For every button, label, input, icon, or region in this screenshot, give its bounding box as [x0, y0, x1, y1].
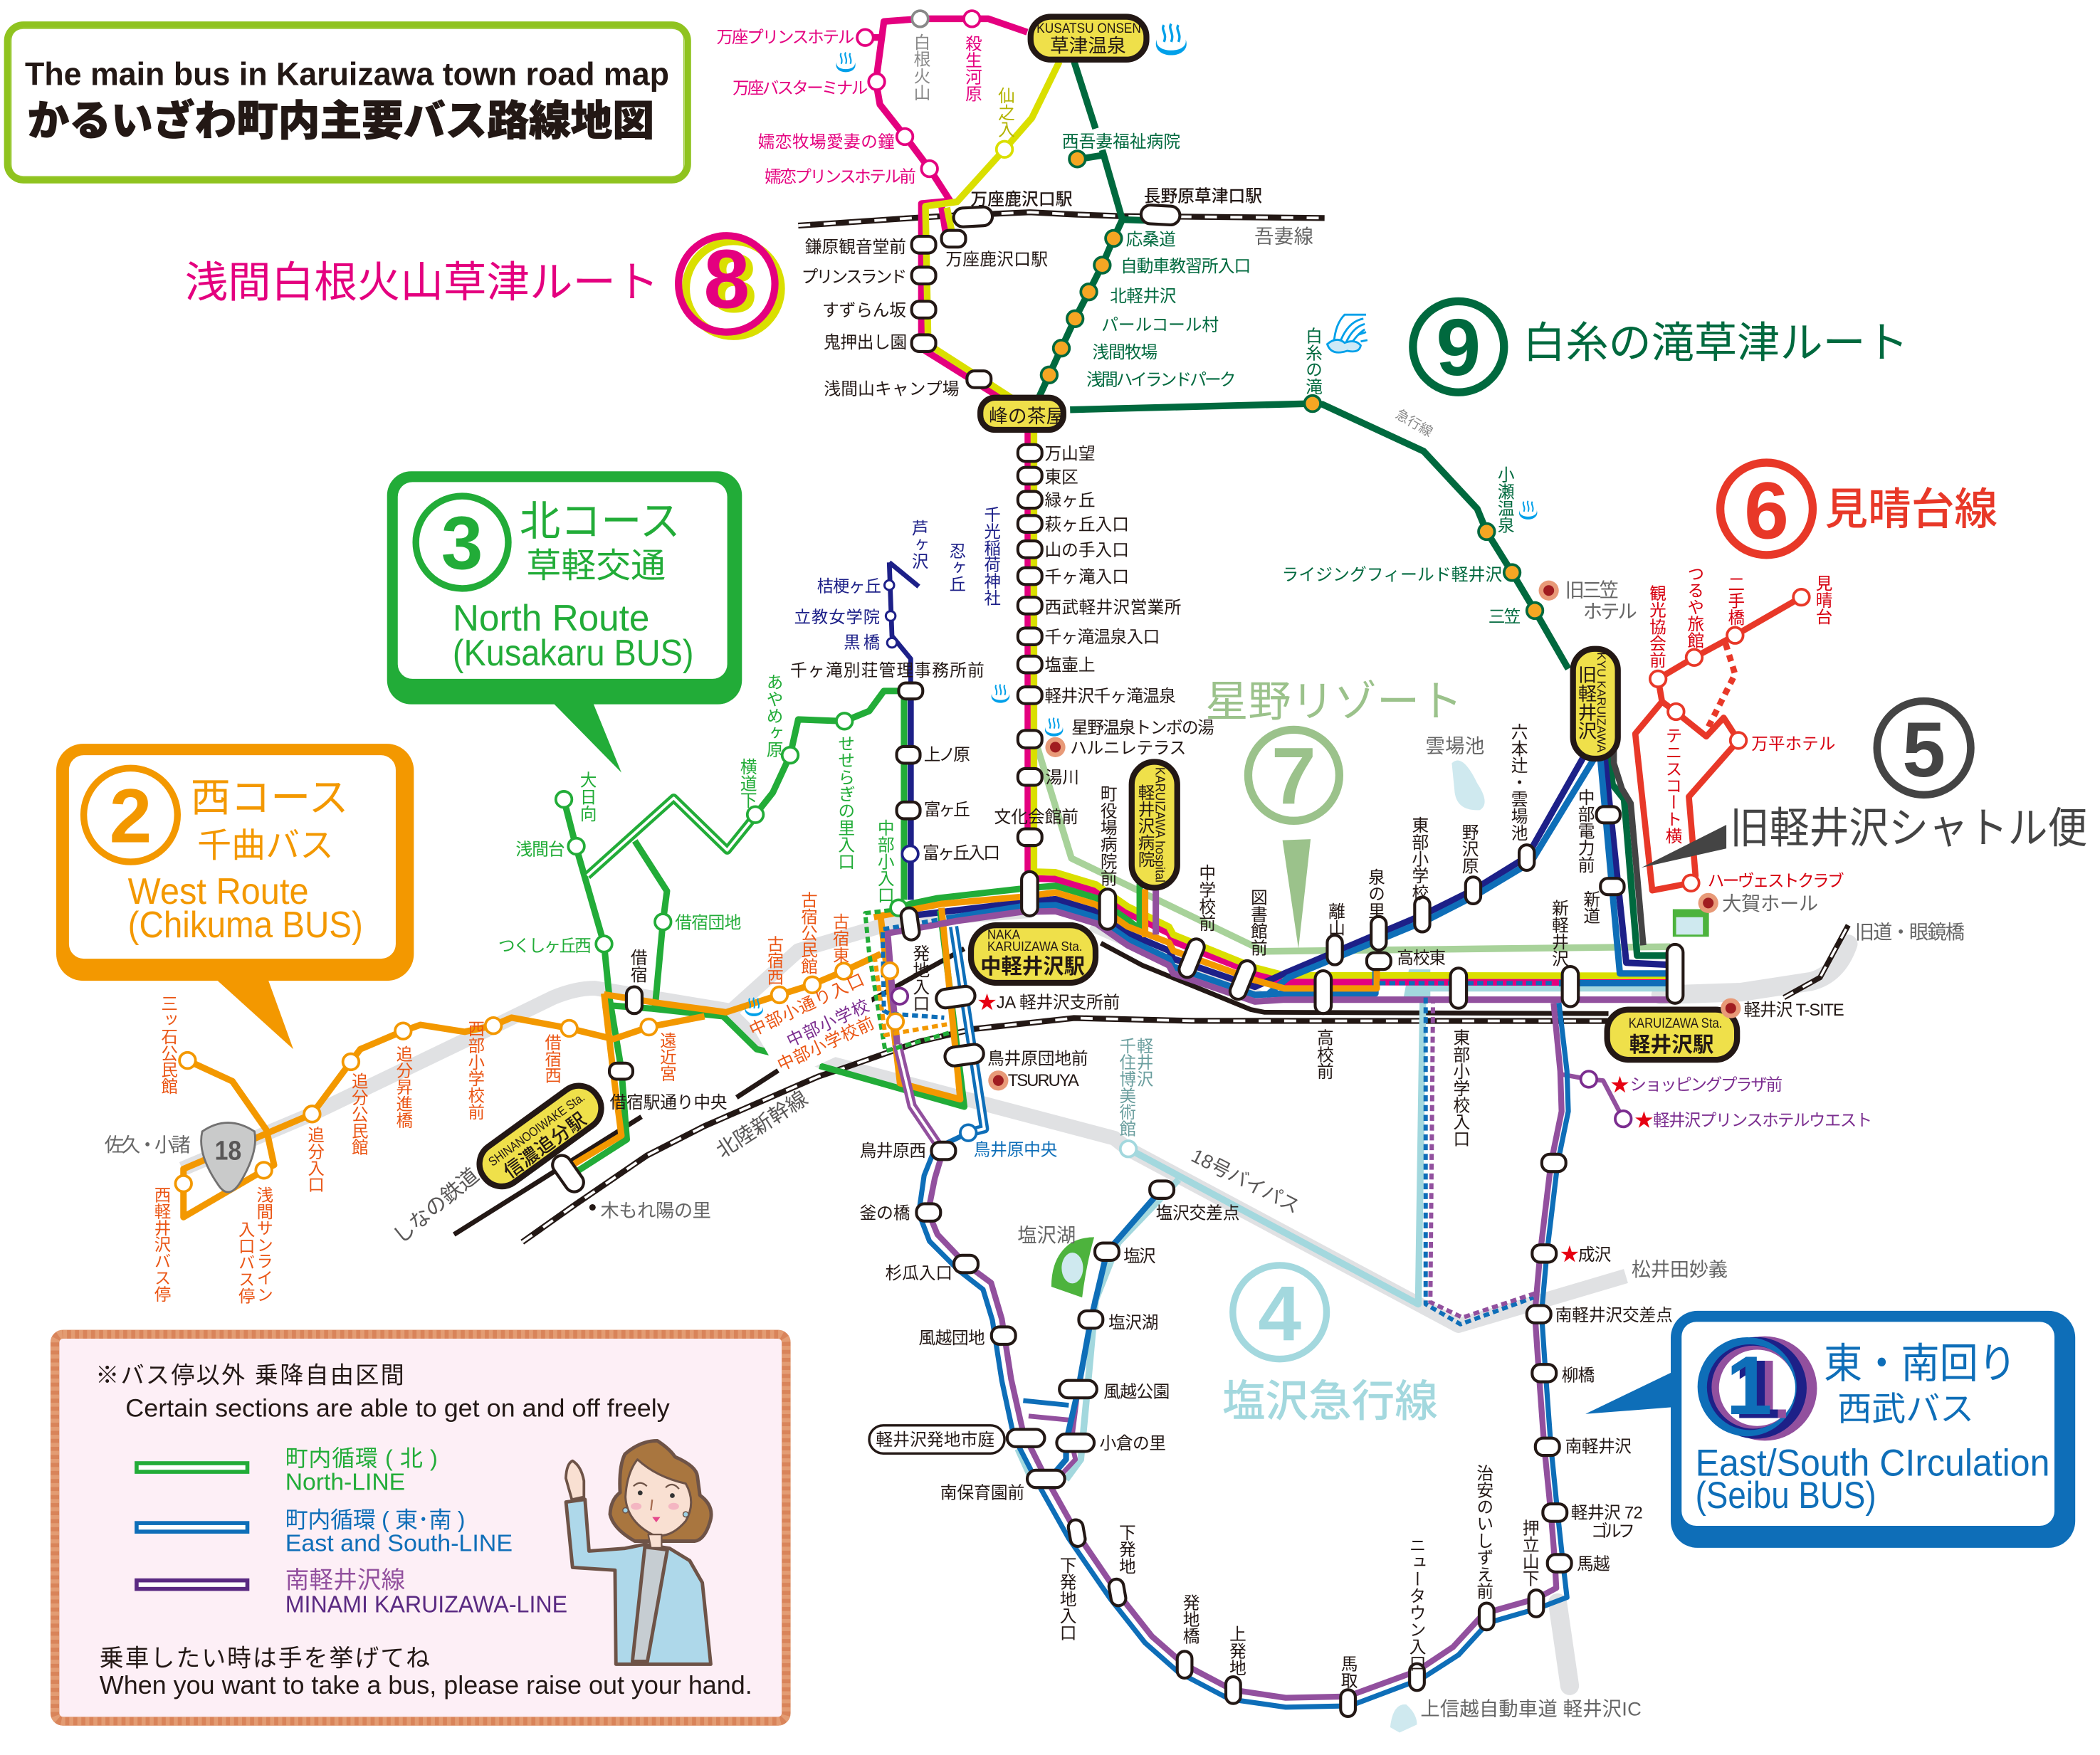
stop: Karuizawa Hatchi market: 軽井沢発地市庭: [876, 1430, 994, 1450]
labels: route 3 north area: 借宿駅通り中央: [610, 1093, 728, 1112]
labels: route 2 west: 借宿西: [542, 1033, 562, 1084]
labels: route 6 and east: 軽井沢 T-SITE: [1744, 1001, 1844, 1020]
labels: route 8 north: 万座鹿沢口駅: [945, 251, 1048, 270]
labels: route 6 and east: 軽井沢プリンスホテルウエスト: [1653, 1111, 1872, 1129]
callout: route 3 North: (Kusakaru BUS): [453, 632, 694, 673]
legend: Minami Karuizawa line: [137, 1567, 567, 1618]
callout: route 2 West: 2: [110, 773, 152, 858]
landmarks: red dots: [589, 581, 1741, 1211]
labels: route 8 north: [717, 28, 1313, 399]
labels: route 6 and east: ★: [1610, 1074, 1629, 1095]
labels: route 2 west: 遠近宮: [658, 1031, 677, 1082]
labels: route 3 north area: 中部小入口: [875, 819, 895, 904]
heading: route 9: 9: [1436, 302, 1481, 392]
labels: central stops: 東部小学校: [1409, 816, 1429, 901]
labels: main trunk: ハルニレテラス: [1070, 739, 1186, 758]
labels: route 9: ライジングフィールド軽井沢: [1281, 566, 1502, 585]
station: Naka-Karuizawa: KARUIZAWA Sta.: [987, 939, 1083, 954]
labels: central stops: TSURUYA: [1008, 1072, 1079, 1090]
stop: Karuizawa Hatchi market: [869, 1425, 1004, 1453]
labels: route 8 north: 万座鹿沢口駅: [970, 190, 1073, 209]
labels: south loop: [860, 1140, 1728, 1720]
heading: route 8: [185, 233, 781, 336]
white backing behind rotated labels: [750, 974, 877, 1078]
heading: route 4: [1222, 1265, 1438, 1425]
labels: south loop: 塩沢: [1123, 1247, 1156, 1266]
callout: route 3 North: 北コース: [520, 499, 681, 545]
labels: south loop: 塩沢湖: [1017, 1224, 1076, 1246]
labels: route 2 west: [105, 891, 877, 1304]
panel: legend: When you want to take a bus, please raise out your hand.: [100, 1671, 752, 1699]
route 3: green north line: [564, 691, 1140, 1173]
labels: route 8 north: すずらん坂: [822, 301, 906, 320]
labels: route 3 north area: あやめヶ原: [764, 673, 783, 758]
labels: route 3 north area: 黒橋: [844, 633, 880, 652]
dotted lines: [865, 909, 1553, 1324]
labels: main trunk: 東区: [1044, 468, 1078, 488]
labels: route 2 west: 浅間サンライン: [254, 1186, 273, 1302]
labels: route 3 north area: 横道下: [737, 758, 757, 808]
station: Karuizawa hospital: 軽井沢病院: [1136, 784, 1155, 868]
legend: east and south line: 町内循環 ( 東･南 ): [285, 1507, 465, 1533]
labels: route 6 and east: 二手橋: [1726, 575, 1745, 626]
callout: route 3 North: [387, 471, 742, 773]
labels: route 2 west: 追分入口: [305, 1126, 325, 1193]
route 9: dark green line: [1039, 62, 1671, 956]
labels: route 3 north area: 上ノ原: [924, 746, 970, 765]
labels: route 2 west: 西軽井沢バス停: [152, 1186, 171, 1302]
labels: main trunk: 山の手入口: [1044, 541, 1129, 560]
route 1: blue south loop: [919, 1003, 1568, 1707]
labels: main trunk: 湯川: [1046, 768, 1079, 787]
labels: central stops: 新軽井沢: [1549, 900, 1569, 967]
heading: route 8: 浅間白根火山草津ルート: [185, 259, 659, 307]
station: Minenochaya: 峰の茶屋: [989, 406, 1065, 427]
heading: route 4: 4: [1258, 1270, 1301, 1357]
labels: central stops: 鳥井原団地前: [987, 1050, 1088, 1069]
station: Karuizawa: KARUIZAWA Sta.: [1629, 1016, 1722, 1031]
labels: route 8 north: 万座プリンスホテル: [717, 28, 854, 46]
labels: central stops: 東部小学校入口: [1450, 1029, 1470, 1147]
labels: south loop: 風越団地: [918, 1329, 985, 1348]
labels: south loop: 塩沢湖: [1108, 1313, 1158, 1332]
callout: route 3 North: 3: [441, 502, 483, 586]
labels: route 2 west: 中部小通り入口: [746, 970, 867, 1040]
labels: main trunk: 塩壷上: [1044, 656, 1096, 675]
labels: route 9: 小瀬温泉: [1495, 466, 1515, 534]
route: navy trunk: [910, 755, 1667, 987]
labels: south loop: 馬取: [1338, 1655, 1358, 1689]
heading: route 5: [1642, 701, 2087, 868]
labels: south loop: 下発地入口: [1057, 1556, 1076, 1641]
labels: route 8 north: 長野原草津口駅: [1144, 187, 1262, 206]
labels: route 8 north: 鎌原観音堂前: [805, 238, 906, 257]
labels: south loop: 釜の橋: [860, 1204, 910, 1223]
title panel: [7, 25, 688, 180]
labels: south loop: 押立山下: [1520, 1519, 1540, 1587]
illustration: woman raising hand: [566, 1440, 711, 1664]
labels: route 3 north area: 千光稲荷神社: [982, 506, 1001, 606]
labels: south loop: 軽井沢 72: [1571, 1504, 1643, 1523]
route 2: orange west line: [184, 889, 1377, 1217]
labels: south loop: 松井田妙義: [1632, 1258, 1728, 1280]
labels: route 2 west: 古宿西: [765, 935, 784, 986]
panel: legend: 乗車したい時は手を挙げてね: [100, 1645, 430, 1672]
callout: route 1 East/South: 1: [1742, 1342, 1788, 1435]
heading: route 9: [1413, 301, 1909, 392]
heading: route 7: 星野リゾート: [1205, 678, 1462, 726]
labels: route 9: 自動車教習所入口: [1120, 257, 1251, 276]
heading: route 9: 白糸の滝草津ルート: [1523, 319, 1909, 367]
icon: hot springs: [745, 24, 1537, 1016]
labels: route 3 north area: 借宿: [628, 949, 648, 983]
heading: route 8: 8: [703, 233, 750, 326]
icon: waterfall: [1327, 315, 1367, 352]
route 3: double green line: [587, 798, 755, 875]
route 8: yellow line: [925, 62, 1667, 976]
labels: south loop: 18号バイパス: [1188, 1144, 1303, 1218]
labels: route 6 and east: ショッピングプラザ前: [1630, 1075, 1783, 1094]
labels: central stops: 千住博美術館: [1117, 1037, 1136, 1137]
callout: route 1 East/South: (Seibu BUS): [1696, 1475, 1876, 1517]
labels: route 6 and east: つるや旅館: [1685, 565, 1704, 649]
labels: route 2 west: 古宿東: [831, 913, 849, 963]
labels: south loop: 南軽井沢: [1565, 1437, 1632, 1456]
heading: route 7: [1205, 678, 1462, 949]
labels: central stops: [910, 723, 1600, 1147]
station: Karuizawa hospital: KARUIZAWA hospital: [1153, 767, 1168, 882]
labels: central stops: 中学校前: [1196, 864, 1216, 932]
callout: route 2 West: West Route: [128, 870, 309, 912]
labels: route 6 and east: 旧道・眼鏡橋: [1855, 921, 1965, 943]
labels: route 2 west: しなの鉄道: [389, 1164, 483, 1248]
station: Karuizawa hospital: [1132, 762, 1177, 887]
labels: route 2 west: 古宿公民館: [799, 891, 818, 974]
title panel: かるいざわ町内主要バス路線地図: [28, 98, 654, 144]
labels: central stops: 六本辻・雲場池: [1508, 723, 1528, 841]
labels: main trunk: 星野温泉トンボの湯: [1071, 719, 1214, 738]
labels: central stops: 野沢原: [1459, 823, 1479, 874]
labels: south loop: 馬越: [1577, 1555, 1610, 1574]
labels: route 3 north area: 木もれ陽の里: [600, 1200, 711, 1221]
labels: route 9: 白糸の滝: [1303, 327, 1323, 395]
labels: route 9: 西吾妻福祉病院: [1062, 132, 1180, 152]
labels: south loop: 南軽井沢交差点: [1555, 1306, 1673, 1325]
labels: main trunk: 緑ヶ丘: [1044, 491, 1096, 510]
legend: north line: [137, 1445, 438, 1495]
lake and park shapes: [1051, 761, 1709, 1733]
icon: road 18 shield: [201, 1123, 256, 1192]
labels: route 3 north area: 芦ヶ沢: [910, 520, 928, 569]
railway: Hokuriku Shinkansen: [523, 925, 1848, 1242]
route 8: magenta line: [865, 19, 1667, 983]
labels: route 8 north: 嬬恋牧場愛妻の鐘: [758, 132, 895, 151]
labels: route 6 and east: ハーヴェストクラブ: [1708, 872, 1844, 890]
labels: route 3 north area: 桔梗ヶ丘: [817, 577, 881, 596]
labels: route 6 and east: テニスコート横: [1663, 727, 1682, 844]
labels: central stops: 発地入口: [910, 944, 930, 1012]
callout: route 1 East/South: 西武バス: [1837, 1390, 1974, 1428]
labels: main trunk: 文化会館前: [994, 808, 1078, 827]
callout: route 1 East/South: 1: [1726, 1339, 1773, 1432]
labels: main trunk: 西武軽井沢営業所: [1044, 599, 1181, 618]
gray roads: [182, 910, 1848, 1686]
station: Karuizawa: [1607, 1010, 1737, 1060]
labels: route 3 north area: 忍ヶ丘: [947, 542, 966, 592]
labels: route 9: 浅間牧場: [1092, 343, 1157, 362]
heading: route 6: 見晴台線: [1825, 485, 1997, 534]
labels: south loop: 塩沢交差点: [1156, 1204, 1239, 1223]
railway: Shinano Railway: [454, 943, 1609, 1235]
station: Naka-Karuizawa: NAKA: [987, 927, 1020, 942]
labels: central stops: JA 軽井沢支所前: [997, 993, 1120, 1012]
labels: route 9: [1062, 132, 1637, 626]
labels: route 2 west: 三ッ石公民館: [159, 995, 178, 1095]
labels: route 6 and east: ★: [1634, 1110, 1654, 1131]
labels: route 8 north: 白根火山: [911, 33, 930, 101]
callout: route 2 West: 千曲バス: [197, 827, 334, 865]
labels: central stops: 中部電力前: [1575, 789, 1595, 873]
labels: central stops: 新道: [1580, 890, 1600, 924]
labels: route 8 north: 浅間山キャンプ場: [824, 379, 959, 399]
labels: south loop: 発地橋: [1180, 1593, 1200, 1645]
station: Karuizawa: 軽井沢駅: [1629, 1033, 1713, 1057]
railway: Agatsuma line: [798, 212, 1325, 226]
labels: main trunk: 軽井沢千ヶ滝温泉: [1044, 687, 1176, 706]
labels: route 6 and east: 観光協会前: [1647, 584, 1666, 668]
labels: route 3 north area: 借宿団地: [675, 914, 741, 933]
labels: route 8 north: 万座バスターミナル: [733, 79, 868, 98]
legend: north line: North-LINE: [285, 1468, 405, 1495]
legend: north line: 町内循環 ( 北 ): [285, 1445, 438, 1471]
labels: central stops: 泉の里: [1365, 868, 1385, 919]
callout: route 1 East/South: 1: [1734, 1342, 1780, 1435]
labels: route 8 north: 嬬恋プリンスホテル前: [765, 167, 916, 186]
labels: route 3 north area: 富ヶ丘入口: [923, 844, 1000, 863]
callout: route 2 West: [56, 744, 414, 1049]
route 5: shuttle gray line: [1614, 734, 1643, 945]
station: Kyu-Karuizawa: KYU KARUIZAWA: [1595, 652, 1608, 753]
labels: route 3 north area: 大日向: [577, 771, 597, 822]
labels: main trunk: 萩ヶ丘入口: [1044, 515, 1129, 534]
labels: route 9: 浅間ハイランドパーク: [1086, 370, 1237, 389]
legend: Minami Karuizawa line: MINAMI KARUIZAWA-LINE: [285, 1591, 567, 1618]
labels: route 8 north: 仙之入: [995, 87, 1015, 138]
heading: route 5: 5: [1902, 707, 1946, 794]
labels: south loop: 柳橋: [1562, 1366, 1595, 1386]
panel: legend: Certain sections are able to get on and off freely: [125, 1395, 670, 1423]
labels: south loop: 風越公園: [1103, 1382, 1170, 1401]
labels: main trunk: [994, 445, 1214, 827]
labels: south loop: ゴルフ: [1591, 1522, 1635, 1541]
labels: route 2 west: 北陸新幹線: [712, 1087, 812, 1163]
labels: main trunk: 万山望: [1044, 445, 1096, 463]
callout: route 2 West: (Chikuma BUS): [128, 904, 363, 945]
legend: Minami Karuizawa line: 南軽井沢線: [285, 1567, 405, 1593]
station: Shinano-Oiwake: [471, 1077, 609, 1195]
labels: route 2 west: 追分昇進橋: [394, 1045, 413, 1129]
heading: route 6: [1721, 463, 1997, 555]
labels: central stops: 雲場池: [1426, 734, 1484, 757]
labels: south loop: 小倉の里: [1100, 1434, 1166, 1453]
labels: south loop: 杉瓜入口: [886, 1264, 952, 1283]
labels: central stops: 町役場病院前: [1098, 785, 1118, 887]
labels: route 3 north area: つくしヶ丘西: [498, 937, 592, 956]
white pill stops: [549, 204, 1683, 1717]
labels: route 8 north: 鬼押出し園: [824, 333, 907, 352]
callout: route 3 North: North Route: [453, 597, 649, 638]
labels: route 8 north: プリンスランド: [802, 268, 907, 287]
route 3: north line navy branch: [889, 562, 919, 900]
labels: route 6 and east: 見晴台: [1814, 574, 1832, 625]
station: Kyu-Karuizawa: [1573, 649, 1618, 759]
labels: south loop: 治安のいしずえ前: [1474, 1465, 1493, 1599]
labels: central stops: 図書館前: [1248, 889, 1268, 956]
route 1: blue trunk: [947, 759, 1671, 996]
labels: route 6 and east: [1610, 565, 1965, 1131]
callout: route 3 North: 草軽交通: [526, 547, 666, 585]
labels: main trunk: 千ヶ滝温泉入口: [1044, 628, 1160, 647]
labels: route 8 north: 殺生河原: [963, 35, 982, 102]
route 6: red line: [1635, 597, 1801, 890]
station: Kusatsu Onsen: 草津温泉: [1050, 35, 1126, 56]
labels: south loop: 南保育園前: [940, 1483, 1024, 1502]
labels: south loop: 上信越自動車道 軽井沢IC: [1420, 1698, 1642, 1720]
callout: route 1 East/South: [1585, 1311, 2075, 1548]
labels: route 3 north area: せせらぎの里入口: [835, 735, 855, 870]
station: Minenochaya: [980, 398, 1065, 430]
labels: central stops: 軽井沢: [1135, 1037, 1153, 1087]
station: Shinano-Oiwake: SHINANOOIWAKE Sta.: [485, 1090, 587, 1169]
labels: central stops: 高校前: [1314, 1029, 1334, 1080]
station: Naka-Karuizawa: 中軽井沢駅: [980, 955, 1085, 979]
labels: route 3 north area: 立教女学院: [794, 608, 880, 626]
callout: route 1 East/South: East/South CIrculation: [1696, 1442, 2049, 1484]
labels: south loop: ★: [1560, 1243, 1579, 1265]
labels: central stops: ★: [977, 992, 997, 1013]
legend: east and south line: [137, 1507, 513, 1556]
labels: route 3 north area: 浅間台: [515, 840, 565, 860]
station: Naka-Karuizawa: [971, 925, 1096, 983]
heading: route 4: 塩沢急行線: [1222, 1377, 1438, 1425]
labels: route 3 north area: 富ヶ丘: [924, 800, 970, 819]
labels: route 8 north: 吾妻線: [1254, 226, 1313, 248]
heading: route 6: 6: [1744, 465, 1789, 555]
labels: route 9: パールコール村: [1101, 315, 1219, 334]
white ring stops: [175, 11, 1810, 1191]
labels: route 9: 応桑道: [1126, 230, 1176, 249]
labels: route 9: ホテル: [1583, 600, 1637, 622]
labels: south loop: 下発地: [1116, 1524, 1136, 1574]
labels: route 3 north area: [498, 506, 1001, 1221]
labels: route 2 west: 追分公民館: [350, 1072, 368, 1156]
route 7: Hoshino Resort line: [1037, 747, 1670, 952]
labels: south loop: 鳥井原中央: [974, 1140, 1058, 1159]
heading: route 7: 7: [1271, 731, 1316, 821]
station: Kusatsu Onsen: KUSATSU ONSEN: [1036, 21, 1141, 36]
labels: south loop: 鳥井原西: [860, 1142, 926, 1161]
station: Kusatsu Onsen: [1031, 17, 1146, 60]
orange stops on route 9: [1041, 151, 1543, 618]
labels: route 2 west: 佐久・小諸: [105, 1134, 191, 1156]
labels: main trunk: 千ヶ滝入口: [1044, 567, 1129, 586]
title panel: The main bus in Karuizawa town road map: [25, 56, 669, 93]
station: Kyu-Karuizawa: 旧軽井沢: [1575, 665, 1597, 740]
route 1 and south: purple line: [888, 884, 1671, 1698]
callout: route 1 East/South: 東・南回り: [1824, 1341, 2017, 1387]
labels: route 9: 北軽井沢: [1110, 287, 1177, 306]
legend: east and south line: East and South-LINE: [285, 1529, 513, 1556]
labels: central stops: 離山: [1325, 902, 1345, 936]
labels: route 3 north area: 千ヶ滝別荘管理事務所前: [790, 661, 985, 680]
labels: south loop: 成沢: [1578, 1245, 1612, 1265]
panel: legend: [55, 1334, 786, 1722]
station: Shinano-Oiwake: 信濃追分駅: [500, 1109, 590, 1183]
callout: route 2 West: 西コース: [191, 775, 349, 820]
labels: central stops: 高校東: [1397, 949, 1446, 968]
labels: route 2 west: 入口バス停: [236, 1221, 255, 1304]
heading: route 8: 8: [711, 236, 757, 330]
icon: road 18 shield: 18: [215, 1135, 241, 1165]
labels: route 9: 旧三笠: [1565, 579, 1619, 601]
labels: route 9: 三笠: [1489, 607, 1521, 626]
labels: south loop: 上発地: [1227, 1625, 1246, 1676]
labels: route 9: 急行線: [1393, 406, 1435, 440]
labels: route 2 west: 中部小学校: [784, 996, 872, 1051]
labels: route 2 west: 中部小学校前: [775, 1013, 877, 1075]
double purple and blue lines west: [898, 927, 985, 1151]
labels: south loop: ニュータウン入口: [1407, 1537, 1426, 1672]
labels: route 6 and east: 万平ホテル: [1751, 734, 1835, 753]
panel: legend: ※バス停以外 乗降自由区間: [95, 1363, 404, 1389]
route 4: Shiozawa express line: [1018, 969, 1671, 1480]
labels: route 6 and east: 大賀ホール: [1722, 892, 1818, 915]
labels: route 2 west: 西部小学校前: [466, 1021, 485, 1120]
